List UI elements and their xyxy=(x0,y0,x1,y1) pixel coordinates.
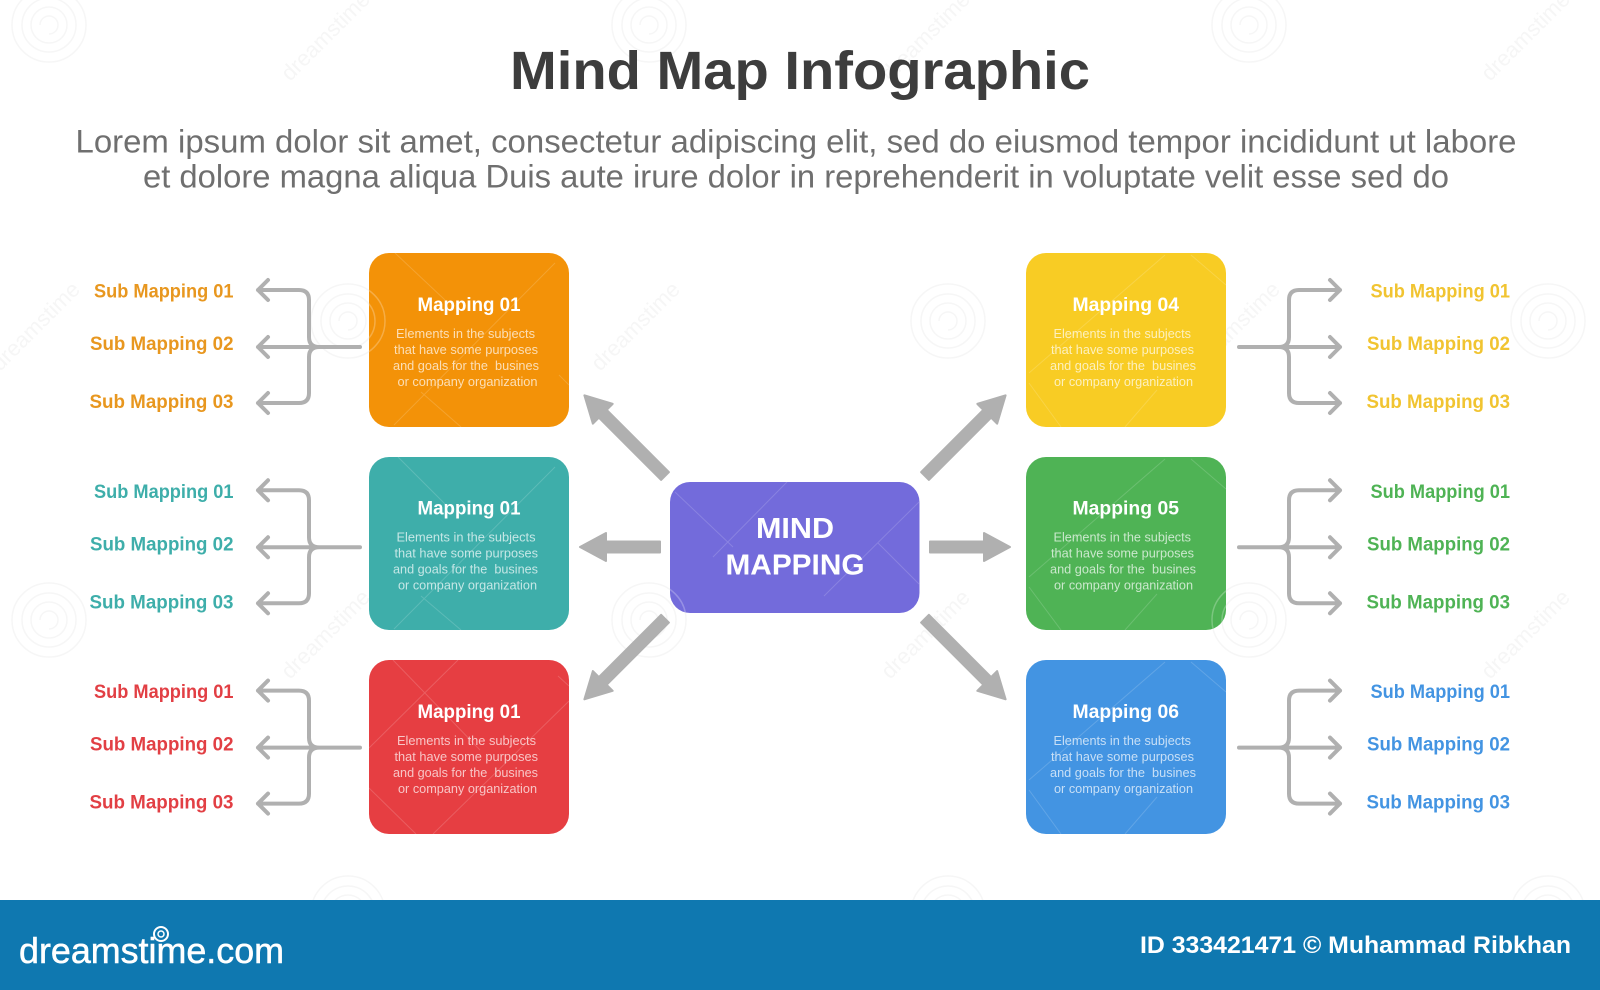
text: dreamstime xyxy=(1186,277,1285,376)
panel: mapping 04 yellow xyxy=(1026,253,1226,427)
sub mapping labels: teal: Sub Mapping 03 xyxy=(90,592,234,613)
arrow: center to mapping 01 orange xyxy=(574,385,675,486)
bracket arrows: green sub mappings xyxy=(1239,480,1340,613)
sub mapping labels: red: Sub Mapping 02 xyxy=(90,735,234,756)
panel: mapping 05 green: Mapping 05 xyxy=(1072,498,1179,520)
panel: mapping 05 green: Elements in the subjects xyxy=(1054,530,1191,544)
panel: mapping 01 teal: that have some purposes xyxy=(394,546,538,560)
text: dreamstime xyxy=(276,585,375,684)
sub mapping labels: orange xyxy=(90,282,234,413)
panel: central mind mapping node: MIND xyxy=(756,513,834,545)
sub mapping labels: blue: Sub Mapping 03 xyxy=(1366,793,1510,814)
panel: mapping 05 green: and goals for the busines xyxy=(1050,562,1196,576)
sub mapping labels: blue: Sub Mapping 01 xyxy=(1370,682,1510,703)
sub mapping labels: teal: Sub Mapping 02 xyxy=(90,534,234,555)
panel: mapping 01 red xyxy=(369,660,569,834)
sub mapping labels: yellow: Sub Mapping 01 xyxy=(1370,282,1510,302)
panel: mapping 06 blue: that have some purposes xyxy=(1051,749,1194,764)
panel: mapping 01 orange xyxy=(369,253,569,427)
panel: mapping 01 teal: or company organization xyxy=(398,578,537,592)
panel: mapping 01 orange: Elements in the subjects xyxy=(396,326,535,341)
panel: mapping 01 red: that have some purposes xyxy=(394,749,538,764)
text: dreamstime xyxy=(1476,585,1575,684)
subtitle text: et dolore magna aliqua Duis aute irure dolor in reprehenderit in voluptate velit esse sed do xyxy=(143,158,1449,194)
panel: mapping 04 yellow: Mapping 04 xyxy=(1072,294,1179,316)
text: dreamstime xyxy=(876,585,975,684)
sub mapping labels: teal xyxy=(90,482,234,613)
sub mapping labels: green: Sub Mapping 01 xyxy=(1370,482,1510,503)
panel: mapping 01 orange: or company organization xyxy=(398,374,538,389)
arrow: center to mapping 04 yellow xyxy=(915,385,1016,486)
panel: mapping 01 teal: Elements in the subjects xyxy=(396,530,536,544)
subtitle text: Lorem ipsum dolor sit amet, consectetur adipiscing elit, sed do eiusmod tempor incididunt ut labore xyxy=(76,124,1517,160)
panel: mapping 06 blue: or company organization xyxy=(1054,781,1193,796)
panel: mapping 01 red: or company organization xyxy=(398,781,537,796)
panel: mapping 01 teal: and goals for the busines xyxy=(393,562,538,576)
panel: central mind mapping node: MAPPING xyxy=(726,550,864,582)
panel: mapping 06 blue: and goals for the busines xyxy=(1050,765,1196,780)
panel: mapping 04 yellow: or company organization xyxy=(1054,374,1193,389)
arrow: center to mapping 05 green xyxy=(930,533,1010,561)
footer logo: dreamstime.com: dreamstime.com xyxy=(19,930,284,971)
sub mapping labels: green: Sub Mapping 02 xyxy=(1367,534,1510,555)
arrow: center to mapping 01 teal xyxy=(580,533,660,561)
sub mapping labels: blue xyxy=(1366,682,1510,814)
sub mapping labels: red: Sub Mapping 03 xyxy=(90,793,234,814)
sub mapping labels: yellow: Sub Mapping 03 xyxy=(1366,392,1510,413)
sub mapping labels: yellow xyxy=(1366,282,1510,413)
panel: mapping 05 green: or company organization xyxy=(1054,578,1193,592)
sub mapping labels: red: Sub Mapping 01 xyxy=(94,682,234,703)
panel: mapping 01 teal: Mapping 01 xyxy=(418,498,521,520)
panel: mapping 05 green xyxy=(1026,457,1226,630)
panel: mapping 01 orange: Mapping 01 xyxy=(418,294,521,316)
footer bar xyxy=(0,900,1600,990)
panel: mapping 04 yellow: that have some purposes xyxy=(1051,342,1194,357)
sub mapping labels: orange: Sub Mapping 03 xyxy=(90,392,234,413)
panel: mapping 01 red: Elements in the subjects xyxy=(397,733,536,748)
panel: mapping 06 blue: Mapping 06 xyxy=(1072,701,1179,723)
panel: mapping 01 orange: and goals for the busines xyxy=(393,358,539,373)
sub mapping labels: teal: Sub Mapping 01 xyxy=(94,482,234,503)
title: Mind Map Infographic xyxy=(510,41,1090,101)
panel: mapping 01 orange: that have some purposes xyxy=(394,342,538,357)
panel: mapping 06 blue xyxy=(1026,660,1226,834)
bracket arrows: orange sub mappings xyxy=(258,280,360,413)
bracket arrows: blue sub mappings xyxy=(1239,681,1340,814)
panel: central mind mapping node xyxy=(670,482,920,613)
panel: mapping 01 red: Mapping 01 xyxy=(418,701,521,723)
subtitle text xyxy=(76,124,1517,194)
panel: mapping 05 green: that have some purposes xyxy=(1051,546,1194,560)
footer credit: ID 333421471 © Muhammad Ribkhan xyxy=(1140,932,1571,959)
arrow: center to mapping 01 red xyxy=(574,609,675,709)
arrow: center to mapping 06 blue xyxy=(915,609,1016,709)
bracket arrows: red sub mappings xyxy=(258,681,360,814)
sub mapping labels: blue: Sub Mapping 02 xyxy=(1367,735,1510,756)
panel: mapping 01 teal xyxy=(369,457,569,630)
text: dreamstime xyxy=(586,277,685,376)
sub mapping labels: green: Sub Mapping 03 xyxy=(1366,592,1510,613)
sub mapping labels: orange: Sub Mapping 02 xyxy=(90,334,234,355)
sub mapping labels: green xyxy=(1366,482,1510,613)
panel: mapping 06 blue: Elements in the subjects xyxy=(1054,733,1191,748)
sub mapping labels: orange: Sub Mapping 01 xyxy=(94,282,234,302)
sub mapping labels: yellow: Sub Mapping 02 xyxy=(1367,334,1510,355)
bracket arrows: yellow sub mappings xyxy=(1239,280,1340,413)
panel: mapping 01 red: and goals for the busines xyxy=(393,765,538,780)
panel: mapping 04 yellow: Elements in the subjects xyxy=(1054,326,1191,341)
bracket arrows: teal sub mappings xyxy=(258,480,360,613)
panel: mapping 04 yellow: and goals for the busines xyxy=(1050,358,1196,373)
sub mapping labels: red xyxy=(90,682,234,814)
